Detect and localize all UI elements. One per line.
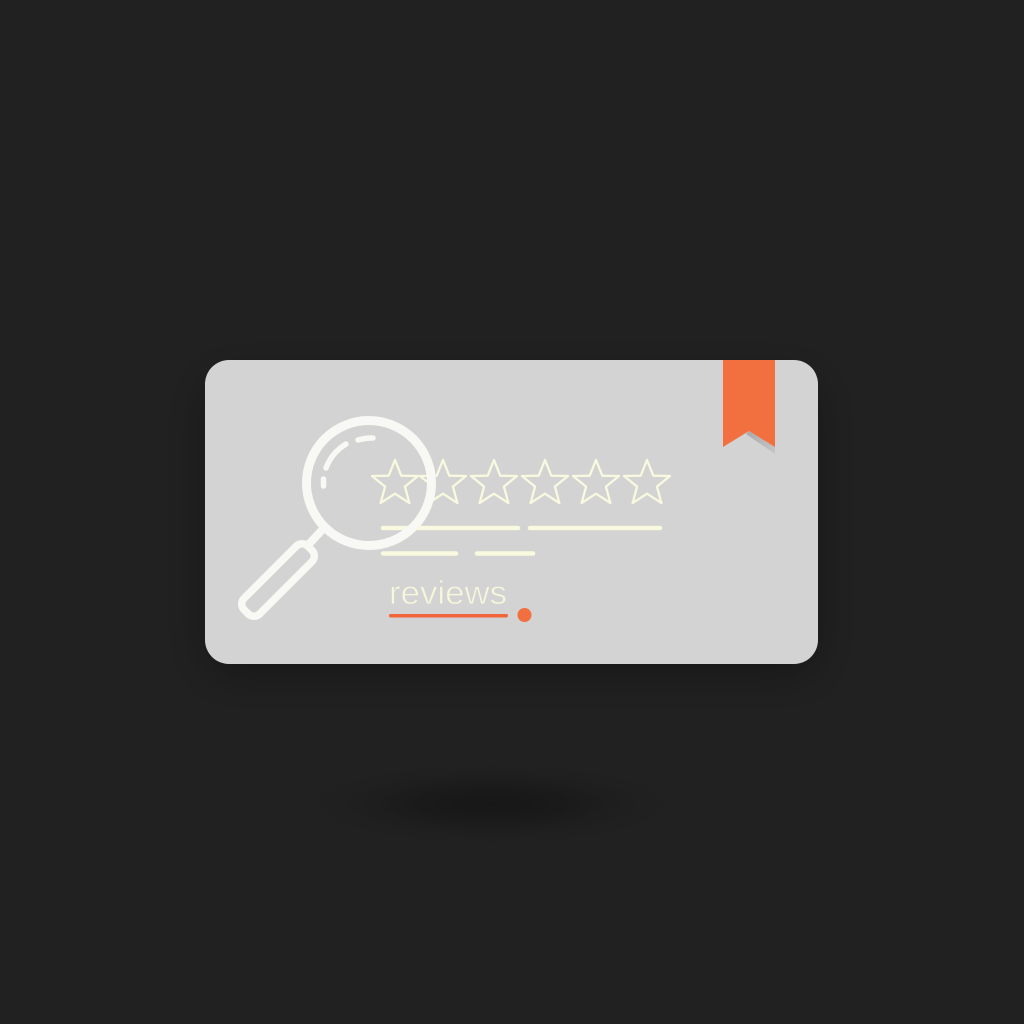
floating shadow below card <box>292 760 692 848</box>
panel: review card <box>205 360 818 664</box>
card drop shadow <box>215 380 808 656</box>
orange underline <box>389 614 508 618</box>
star 4 <box>522 460 568 503</box>
ribbon fold shadow <box>746 431 775 454</box>
star 5 <box>573 460 619 503</box>
magnifying glass icon <box>238 420 432 620</box>
label: reviews: reviews <box>389 574 507 611</box>
placeholder text lines <box>383 528 660 554</box>
star 1 <box>372 460 418 503</box>
ribbon body <box>723 360 775 447</box>
orange dot <box>518 608 532 622</box>
lens ring <box>306 420 432 546</box>
lens glare <box>326 444 346 468</box>
star 3 <box>471 460 517 503</box>
star 2 <box>420 460 466 503</box>
star rating row <box>372 460 670 503</box>
bookmark ribbon <box>723 360 775 454</box>
star 6 <box>624 460 670 503</box>
handle neck <box>309 529 323 544</box>
handle grip <box>238 540 318 620</box>
